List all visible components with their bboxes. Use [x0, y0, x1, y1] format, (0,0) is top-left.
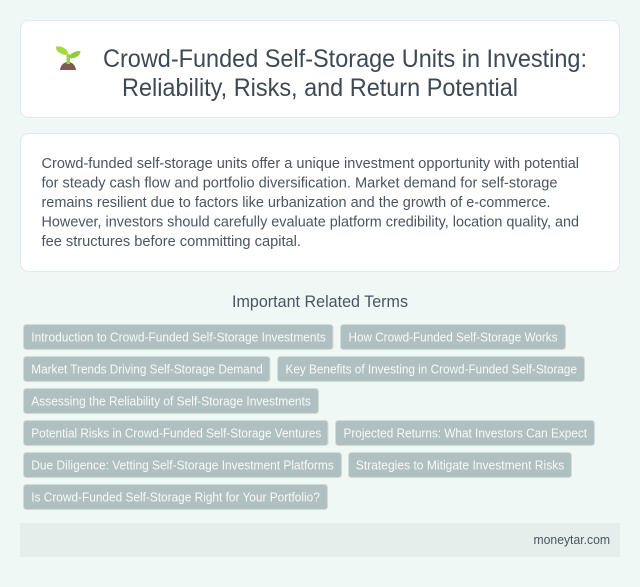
- title: Crowd-Funded Self-Storage Units in Investing:: [103, 45, 587, 73]
- chip: assessing reliability: [24, 388, 318, 414]
- panel: footer: [20, 523, 620, 557]
- chip: projected returns: Projected Returns: What Investors Can Expect: [344, 426, 587, 440]
- chip: portfolio fit: [24, 484, 328, 510]
- title: [103, 45, 587, 102]
- heading: important related terms: Important Related Terms: [232, 293, 408, 311]
- chip: potential risks: Potential Risks in Crowd-Funded Self-Storage Ventures: [31, 426, 322, 440]
- text block: summary: for steady cash flow and portfolio diversification. Market demand for self-storage: [42, 174, 558, 192]
- chip: strategies: Strategies to Mitigate Investment Risks: [356, 458, 565, 472]
- chip: introduction: Introduction to Crowd-Funded Self-Storage Investments: [31, 330, 326, 344]
- text block: summary: remains resilient due to factors like urbanization and the growth of e-commerce.: [42, 194, 550, 211]
- chip: how it works: How Crowd-Funded Self-Storage Works: [348, 330, 558, 344]
- chip: market trends: [24, 356, 270, 382]
- text block: summary: [42, 155, 579, 250]
- chip: key benefits: Key Benefits of Investing in Crowd-Funded Self-Storage: [286, 362, 577, 376]
- chip: market trends: Market Trends Driving Self-Storage Demand: [31, 362, 263, 376]
- chip: due diligence: [24, 452, 342, 478]
- chip: assessing reliability: Assessing the Reliability of Self-Storage Investments: [31, 394, 311, 408]
- chip: projected returns: [336, 420, 594, 446]
- chip: portfolio fit: Is Crowd-Funded Self-Storage Right for Your Portfolio?: [31, 490, 320, 504]
- chip: potential risks: [24, 420, 328, 446]
- chip: strategies: [348, 452, 572, 478]
- panel: related term chips: [24, 324, 594, 510]
- chip: key benefits: [278, 356, 584, 382]
- footer source text: moneytar.com: [534, 532, 610, 547]
- panel: summary card: [20, 134, 620, 272]
- icon: seedling: [56, 46, 80, 70]
- text block: summary: However, investors should carefully evaluate platform credibility, location quality, and: [42, 214, 579, 230]
- text block: summary: Crowd-funded self-storage units offer a unique investment opportunity with potential: [42, 155, 579, 172]
- chip: how it works: [340, 324, 566, 350]
- panel: title card: [20, 20, 620, 118]
- text block: summary: fee structures before committing capital.: [42, 233, 301, 250]
- chip: introduction: [24, 324, 333, 350]
- chip: due diligence: Due Diligence: Vetting Self-Storage Investment Platforms: [31, 458, 334, 472]
- title: Reliability, Risks, and Return Potential: [122, 74, 518, 102]
